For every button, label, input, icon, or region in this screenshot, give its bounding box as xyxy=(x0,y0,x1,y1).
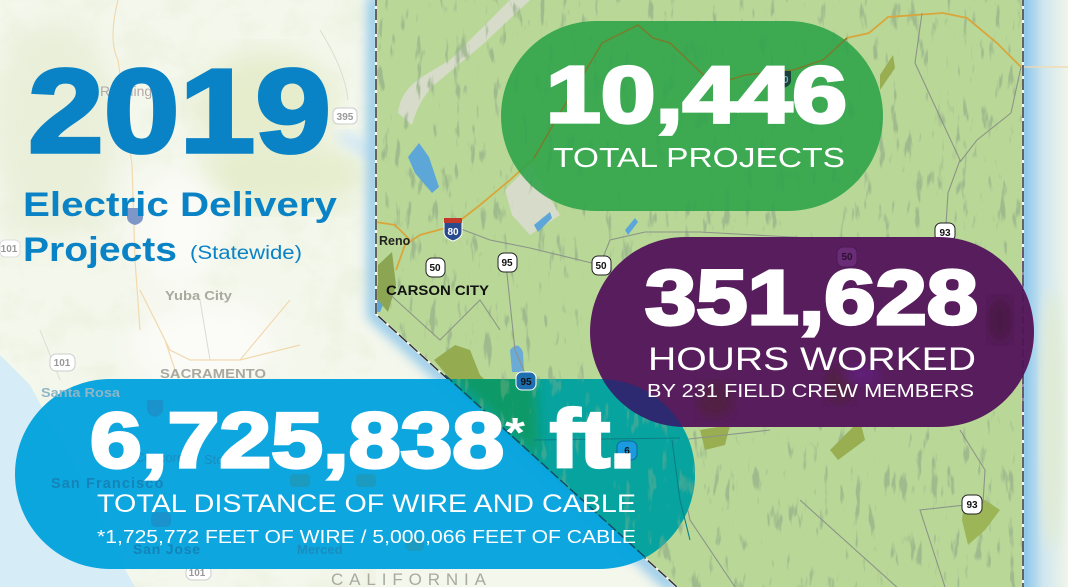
Nevada state border xyxy=(376,0,1023,587)
title: 2019: 2019 xyxy=(28,45,331,178)
faint map labels and shields beneath the blue pill text: San Francisco xyxy=(51,476,164,492)
map shields: Nevada: 50 xyxy=(595,261,607,272)
map shields: California: 395 xyxy=(337,112,354,123)
map labels: Nevada: CARSON CITY xyxy=(386,283,489,298)
number: 6,725,838: 6,725,838 xyxy=(90,396,504,484)
map shields over the pills: 50 xyxy=(841,252,853,263)
asterisk: * xyxy=(505,409,526,456)
faint map labels and shields beneath the blue pill text: Stockton xyxy=(204,452,255,467)
note: wire and cable breakdown: *1,725,772 FEET OF WIRE / 5,000,066 FEET OF CABLE xyxy=(97,527,636,547)
map labels: California xyxy=(100,83,487,587)
faint map labels and shields beneath the blue pill text: San Jose xyxy=(133,541,201,557)
map: Nevada state xyxy=(370,0,1030,587)
map shields: California: 101 xyxy=(189,568,206,579)
forested patches xyxy=(378,252,396,312)
map shields: California: 101 xyxy=(1,244,18,255)
subtitle line one: Electric Delivery xyxy=(23,186,337,224)
map shields: Nevada: 93 xyxy=(939,228,951,239)
subtitle qualifier: (Statewide) xyxy=(190,243,302,264)
map shields: Nevada: 50 xyxy=(429,263,441,274)
label: crew members: BY 231 FIELD CREW MEMBERS xyxy=(647,381,974,401)
lakes xyxy=(408,143,439,193)
title block xyxy=(23,45,337,269)
label: hours worked: HOURS WORKED xyxy=(648,341,976,377)
stat: hours worked xyxy=(645,255,978,401)
faint map labels and shields beneath the blue pill text: Concord xyxy=(135,450,184,465)
icon: interstate 80 shield: 80 xyxy=(777,75,789,86)
map shields: California: 101 xyxy=(54,358,71,369)
map shields: Nevada xyxy=(426,218,982,514)
unit: ft.: ft. xyxy=(550,394,635,485)
glow along the Nevada border xyxy=(374,0,675,587)
glow on the east side of Nevada xyxy=(1023,0,1068,587)
faint map labels and shields beneath the blue pill text: Merced xyxy=(297,542,343,557)
map labels: Nevada: Reno xyxy=(379,234,411,248)
map labels: California: Redding xyxy=(100,83,152,99)
label: total distance: TOTAL DISTANCE OF WIRE AND CABLE xyxy=(97,490,636,518)
map labels: California: Yuba City xyxy=(165,288,233,303)
map shields over the pills xyxy=(516,247,857,460)
map shields: Nevada: 93 xyxy=(966,500,978,511)
map shields: Nevada: 95 xyxy=(501,258,513,269)
label: total projects: TOTAL PROJECTS xyxy=(553,142,845,173)
stat: wire and cable total xyxy=(90,394,636,547)
map shields: California xyxy=(0,108,357,580)
map labels: Nevada xyxy=(379,234,489,298)
panel: hours worked pill background xyxy=(590,237,1034,427)
map shields: Nevada: 80 xyxy=(447,227,459,238)
faint map labels and shields beneath the blue pill text xyxy=(41,385,424,557)
NEVADA map label: NEVADA xyxy=(666,236,767,252)
subtitle line two: Projects xyxy=(23,231,177,269)
stat: 10,446: 10,446 xyxy=(546,50,847,139)
roads xyxy=(376,13,1021,270)
map labels: California: SACRAMENTO xyxy=(160,366,266,381)
number: 351,628: 351,628 xyxy=(645,255,978,341)
panel: total projects pill xyxy=(501,21,883,211)
map shields over the pills: 95 xyxy=(520,377,532,388)
icon: interstate 80 shield xyxy=(775,71,791,88)
panel: wire and cable pill background xyxy=(15,370,700,575)
faint map labels and shields beneath the blue pill text: Santa Rosa xyxy=(41,385,121,400)
map shields over the pills: 6 xyxy=(624,446,630,457)
